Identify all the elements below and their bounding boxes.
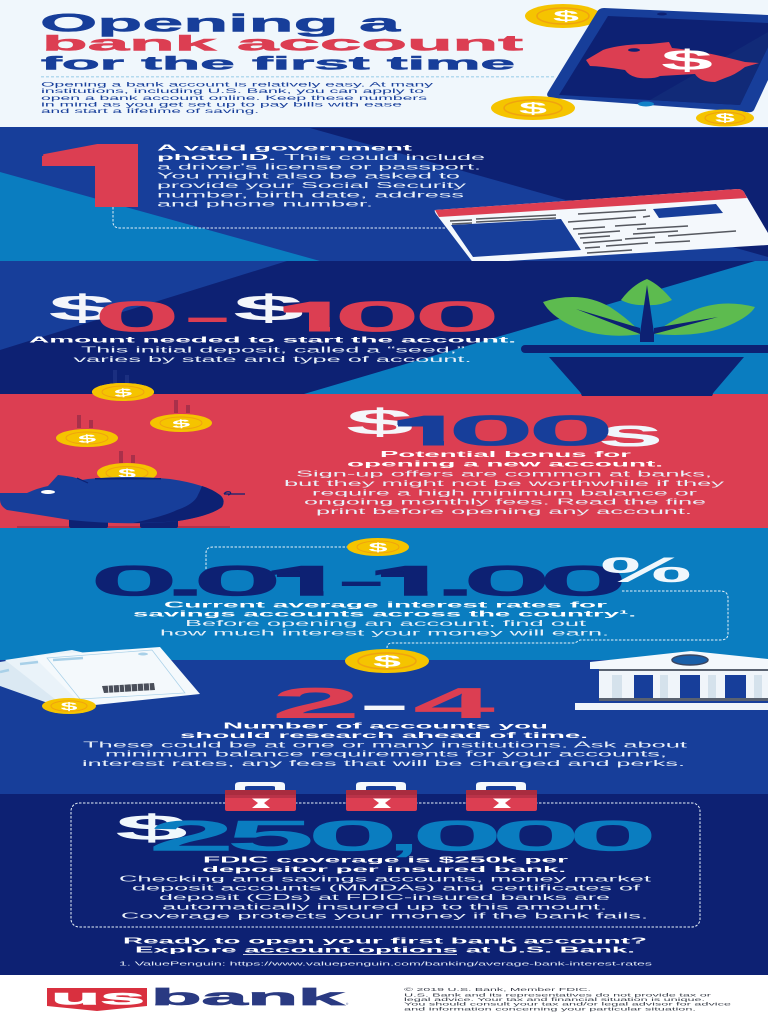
- call to action: Explore account options at U.S. Bank.: [135, 945, 635, 955]
- seed text: varies by state and type of account.: [74, 354, 472, 364]
- stat: $100s: [348, 407, 660, 446]
- footnote: 1. ValuePenguin: https://www.valuepenguin.com/banking/average-bank-interest-rates: [119, 961, 653, 967]
- seed text: Amount needed to start the account.: [29, 335, 516, 345]
- icon: falling coin 2: [150, 400, 212, 432]
- bonus text: ongoing monthly fees. Read the fine: [304, 497, 706, 507]
- icon: large coin: $: [373, 654, 401, 670]
- interest text: savings accounts across the country¹.: [133, 609, 636, 619]
- icon: coin bottom right: $: [715, 111, 736, 125]
- icon: falling coin 3: [56, 415, 118, 447]
- stat: 0.01-1.00%: .: [432, 558, 478, 606]
- accounts text: should research ahead of time.: [180, 730, 588, 740]
- accounts text: Number of accounts you: [223, 721, 548, 731]
- icon: bank building: [575, 651, 768, 710]
- intro text: open a bank account online. Keep these numbers: [41, 95, 427, 102]
- icon: small coin: $: [60, 701, 78, 713]
- seed text: [29, 335, 516, 364]
- interest text: Current average interest rates for: [164, 600, 609, 610]
- icon: ID card: [435, 189, 768, 263]
- legal text: [404, 986, 732, 1012]
- big number 1: [42, 144, 138, 207]
- stat: $0 - $100: 0: [413, 294, 501, 342]
- stat: 0.01-1.00%: %: [600, 551, 692, 590]
- stat: $250,000: $: [115, 807, 188, 848]
- icon: piggy bank: [0, 475, 245, 528]
- icon: coin: $: [368, 540, 388, 554]
- icon: falling coin 4: $: [118, 466, 137, 480]
- seed text: This initial deposit, called a “seed,”: [81, 345, 465, 355]
- icon: coin: [347, 538, 409, 556]
- stat: 0.01-1.00%: 0: [538, 558, 628, 606]
- panel: bonus: [0, 383, 768, 528]
- FDIC text: deposit accounts (MMDAs) and certificates of: [132, 883, 642, 893]
- interest text: how much interest your money will earn.: [160, 627, 609, 637]
- stat: $250,000: 0: [411, 813, 504, 861]
- ID text: [157, 143, 485, 209]
- icon: coin bottom left: [491, 96, 575, 120]
- icon: documents: [0, 647, 200, 705]
- title: for the first time: [41, 52, 515, 74]
- FDIC text: [119, 855, 653, 921]
- accounts text: These could be at one or many institutions. Ask about: [83, 739, 689, 749]
- call to action: [123, 935, 647, 955]
- stat: 0.01-1.00%: 1: [364, 558, 459, 606]
- logo: U.S. Bank: us: [51, 986, 145, 1010]
- stat: $250,000: 0: [307, 813, 399, 861]
- stat: $0 - $100: 1: [273, 294, 358, 342]
- ID text: number, birth date, address: [157, 189, 466, 199]
- logo: U.S. Bank: bank: [151, 984, 347, 1010]
- title: bank account: [42, 32, 523, 56]
- stat: $250,000: 5: [226, 813, 315, 861]
- stat: 0.01-1.00%: –: [340, 558, 383, 606]
- stat: $250,000: 2: [148, 813, 235, 861]
- stat: 0.01-1.00%: 0: [89, 558, 179, 606]
- stat: 0.01-1.00%: 1: [260, 558, 355, 606]
- icon: coin bottom left: $: [519, 100, 547, 118]
- big number 1: 1: [22, 125, 196, 227]
- legal text: © 2019 U.S. Bank, Member FDIC.: [404, 986, 591, 992]
- stat: $250,000: 0: [568, 813, 658, 861]
- panel: interest rates: [0, 528, 768, 660]
- icon: falling coin 2: $: [172, 418, 191, 431]
- logo: U.S. Bank: [47, 984, 349, 1011]
- icon: large coin: [345, 649, 429, 673]
- bonus text: print before opening any account.: [316, 506, 692, 516]
- ID text: a driver's license or passport.: [157, 161, 481, 171]
- stat: $100s: 0: [447, 408, 535, 456]
- stat: $100s: 1: [387, 408, 472, 456]
- ID text: provide your Social Security: [157, 180, 468, 190]
- intro text: in mind as you get set up to pay bills with ease: [41, 102, 403, 108]
- ID text: A valid government: [157, 143, 412, 153]
- stat: $250,000: 0: [491, 813, 581, 861]
- stat: $0 - $100: 0: [93, 294, 181, 342]
- panel: government photo ID: [0, 125, 768, 263]
- ID text: You might also be asked to: [157, 171, 460, 181]
- ID text: photo ID.: [157, 152, 276, 162]
- icon: tablet with piggy bank: $: [661, 45, 713, 77]
- icon: lock 3: [466, 782, 537, 811]
- legal text: You should consult your tax and/or legal advisor for advice: [404, 1002, 732, 1007]
- ID text: and phone number.: [157, 199, 373, 209]
- title: Opening a: [40, 10, 403, 38]
- panel: number of accounts: [0, 647, 768, 794]
- panel: FDIC coverage: [0, 782, 768, 975]
- stat: 2-4: 2: [271, 680, 361, 728]
- bonus text: Sign-up offers are common at banks,: [296, 468, 712, 478]
- stat: $250,000: ,: [388, 813, 420, 861]
- stat: $0 - $100: [50, 293, 494, 332]
- intro text: [41, 82, 435, 115]
- intro text: institutions, including U.S. Bank, you can apply to: [41, 88, 425, 95]
- accounts text: interest rates, any fees that will be charged and perks.: [82, 758, 685, 768]
- FDIC text: automatically insured up to this amount.: [162, 901, 607, 911]
- interest text: Before opening an account, find out: [185, 618, 588, 628]
- stat: 0.01-1.00%: 0: [192, 558, 283, 606]
- stat: 2-4: [271, 680, 495, 730]
- icon: falling coin 4: [97, 451, 157, 483]
- panel: bonus: $: [114, 387, 133, 400]
- panel: header: [0, 0, 768, 128]
- stat: 0.01-1.00%: [96, 557, 690, 596]
- stat: 0.01-1.00%: .: [162, 558, 208, 606]
- interest text: [133, 600, 636, 637]
- panel: seed deposit: [0, 261, 768, 401]
- stat: $0 - $100: $: [48, 288, 116, 328]
- stat: 2-4: –: [362, 682, 407, 730]
- icon: small coin: [42, 698, 96, 714]
- icon: lock 2: [346, 782, 417, 811]
- logo: U.S. Bank: ®: [346, 1002, 349, 1006]
- legal text: and information concerning your particular situation.: [404, 1006, 696, 1012]
- FDIC text: deposit (CDs) at FDIC-insured banks are: [159, 892, 610, 902]
- stat: 2-4: 4: [413, 680, 495, 728]
- icon: falling coin 1: [92, 370, 154, 401]
- stat: $0 - $100: $: [233, 288, 304, 328]
- FDIC text: FDIC coverage is $250k per: [203, 855, 570, 865]
- title: [40, 10, 523, 74]
- ID text: This could include: [284, 152, 485, 162]
- icon: lock 1: [225, 782, 296, 811]
- bonus text: require a high minimum balance or: [312, 487, 697, 497]
- stat: $100s: $: [346, 402, 414, 442]
- icon: falling coin 1: $: [114, 387, 133, 400]
- icon: coin top: $: [553, 8, 581, 25]
- legal text: U.S. Bank and its representatives do not provide tax or: [404, 992, 712, 997]
- stat: $0 - $100: –: [186, 294, 229, 342]
- stat: 0.01-1.00%: 0: [462, 558, 552, 606]
- stat: $100s: 0: [527, 408, 615, 456]
- FDIC text: Checking and savings accounts, money market: [119, 873, 653, 883]
- stat: $0 - $100: 0: [333, 294, 421, 342]
- stat: $250,000: [115, 807, 658, 861]
- icon: coin top: [525, 4, 601, 28]
- FDIC text: depositor per insured bank.: [202, 864, 566, 874]
- bonus text: but they might not be worthwhile if they: [284, 478, 726, 488]
- intro text: Opening a bank account is relatively easy. At many: [41, 82, 435, 88]
- bonus text: [284, 449, 726, 516]
- accounts text: [82, 721, 689, 768]
- call to action: Ready to open your first bank account?: [123, 935, 647, 945]
- bonus text: Potential bonus for: [380, 449, 633, 459]
- icon: falling coin 3: $: [78, 433, 97, 446]
- intro text: and start a lifetime of saving.: [41, 108, 260, 115]
- icon: coin bottom right: [696, 110, 754, 126]
- panel: footer: [0, 975, 768, 1024]
- accounts text: minimum balance requirements for your accounts,: [105, 749, 667, 759]
- bonus text: opening a new account.: [347, 459, 663, 469]
- icon: tablet with piggy bank: [547, 8, 768, 112]
- legal text: legal advice. Your tax and financial situation is unique.: [404, 997, 705, 1002]
- stat: $100s: s: [597, 413, 664, 455]
- FDIC text: Coverage protects your money if the bank fails.: [121, 911, 648, 921]
- icon: plant in pot: [521, 279, 768, 396]
